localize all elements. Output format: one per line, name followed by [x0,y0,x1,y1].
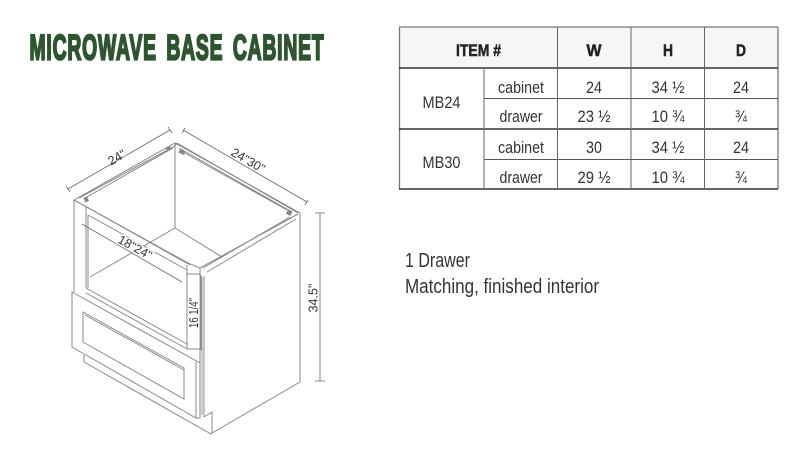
dimension: opening height 16 1/4 inch: 16 1/4" [187,298,201,328]
row group: MB24: 24 [733,78,749,97]
row group: MB24: cabinet [498,78,544,97]
dimension: height 34.5 inch: 34.5" [306,284,320,312]
toe kick side post [201,350,203,415]
dimension: opening 18 to 24 inch: 18"24" [116,232,154,263]
table grid [399,27,778,189]
row group: MB24: 34 ½ [652,78,684,97]
table header labels [456,41,746,60]
cabinet outline and carcass [74,143,300,433]
row group: MB30 [422,138,749,187]
row group: MB24: MB24 [422,93,460,112]
dimension: width 24 inch: 24" [106,147,128,168]
table header labels: ITEM # [456,41,501,60]
row group: MB30: ¾ [735,168,748,187]
table header row background [399,27,778,68]
row group: MB24: drawer [500,107,543,126]
dimension: depth 24 to 30 inch [182,128,308,205]
row group: MB30: 10 ¾ [652,168,685,187]
cabinet line drawing [66,127,325,434]
row group: MB30: cabinet [498,138,544,157]
row group: MB24: 23 ½ [578,107,610,126]
feature description text: Matching, finished interior [405,276,599,298]
dimension: height 34.5 inch [306,213,325,381]
row group: MB24: ¾ [735,107,748,126]
row group: MB24: 10 ¾ [652,107,685,126]
feature description text: 1 Drawer [405,250,470,272]
dimension: depth 24 to 30 inch: 24"30" [229,145,267,176]
dimension: opening 18 to 24 inch [82,224,182,282]
corner brackets [83,146,293,216]
row group: MB30: MB30 [422,153,460,172]
specification table [399,27,778,189]
table header labels: D [736,41,746,60]
row group: MB30: 34 ½ [652,138,684,157]
dimension: width 24 inch [66,127,172,192]
row group: MB30: drawer [500,168,543,187]
row group: MB24: 24 [586,78,602,97]
drawer front [72,292,212,434]
dimension: opening height 16 1/4 inch [187,275,201,350]
table header labels: W [586,41,602,60]
row group: MB24 [422,78,749,126]
row group: MB30: 30 [586,138,602,157]
feature description text [405,250,599,298]
row group: MB30: 24 [733,138,749,157]
row group: MB30: 29 ½ [578,168,610,187]
title: MICROWAVE BASE CABINET [30,28,324,68]
table header labels: H [663,41,673,60]
